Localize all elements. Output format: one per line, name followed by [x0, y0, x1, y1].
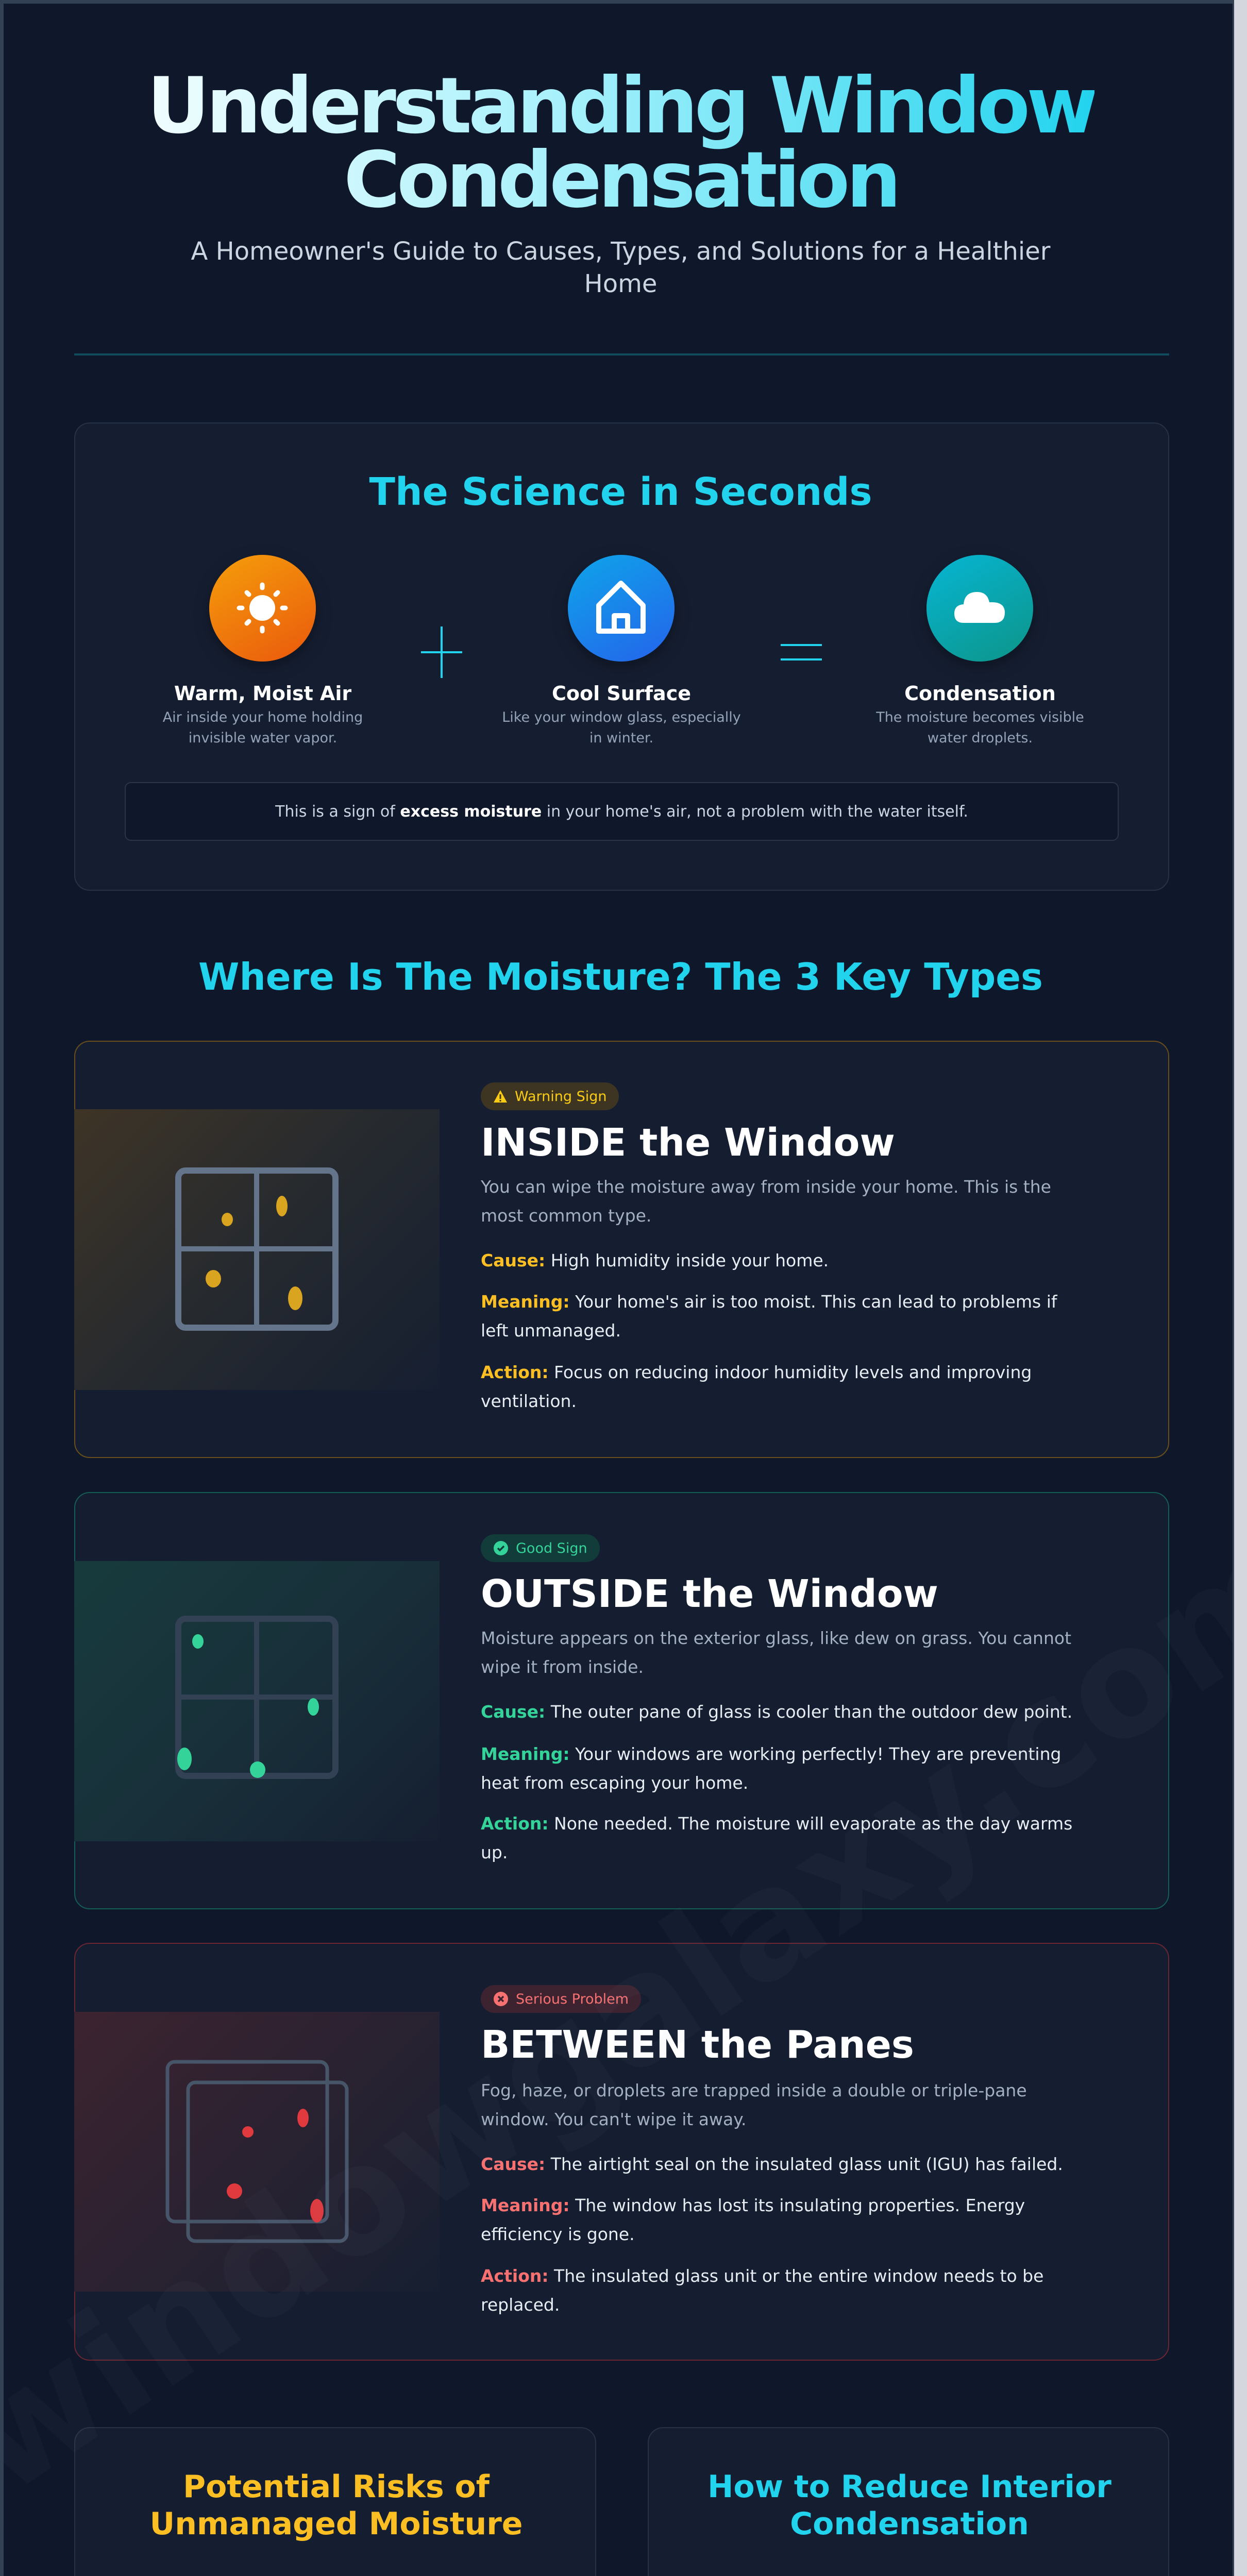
text: inside meaning: Meaning: Your home's air is too moist. This can lead to problems if [481, 1292, 1057, 1312]
text: between meaning: efficiency is gone. [481, 2224, 635, 2244]
badge: warning sign [481, 1082, 619, 1110]
text: outside action [481, 1817, 1072, 1862]
text: outside action: up. [481, 1842, 508, 1862]
text: warm moist air: invisible water vapor. [189, 730, 337, 746]
text: outside action: Action: None needed. The moisture will evaporate as the day warms [481, 1814, 1072, 1834]
text: inside description: You can wipe the moisture away from inside your home. This is the [481, 1177, 1051, 1197]
badge: warning sign: Warning Sign [515, 1088, 606, 1105]
panel: science in seconds [74, 422, 1169, 891]
text: outside description: wipe it from inside. [481, 1657, 644, 1677]
badge: good sign: Good Sign [516, 1540, 587, 1556]
callout: excess moisture: This is a sign of in your home's air, not a problem with the water itself. [275, 803, 968, 820]
text: cool surface: Cool Surface [552, 682, 691, 705]
text: warm moist air: Air inside your home holding [163, 709, 363, 725]
text: condensation [876, 685, 1083, 745]
text: between description: window. You can't wipe it away. [481, 2109, 747, 2129]
text: between description: Fog, haze, or droplets are trapped inside a double or triple-pane [481, 2080, 1027, 2100]
text: warm moist air [163, 685, 362, 745]
text: between action [481, 2269, 1043, 2314]
text: between meaning [481, 2198, 1024, 2244]
text: condensation: water droplets. [928, 730, 1033, 746]
panel: potential risks [74, 2427, 596, 2576]
callout: excess moisture: excess moisture [400, 803, 542, 820]
heading: potential risks [153, 2474, 521, 2541]
heading: between the panes: BETWEEN the Panes [481, 2023, 914, 2067]
heading: potential risks: Potential Risks of [183, 2469, 490, 2505]
text: inside description: most common type. [481, 1206, 651, 1226]
text: condensation: Condensation [904, 682, 1056, 705]
illustration: outside window [74, 1561, 440, 1841]
heading: inside the window: INSIDE the Window [481, 1121, 895, 1165]
title [154, 74, 1094, 208]
heading: 3 key types: Where Is The Moisture? The 3 Key Types [198, 955, 1043, 998]
icon: cloud [926, 555, 1033, 662]
text: cool surface: in winter. [589, 730, 653, 746]
title: Understanding Window [147, 61, 1094, 151]
panel: inside the window [74, 1041, 1169, 1458]
icon: plus [421, 626, 462, 678]
text: outside description [481, 1631, 1071, 1676]
title: Condensation [344, 135, 898, 225]
text: inside cause: Cause: High humidity inside your home. [481, 1250, 829, 1270]
badge: serious problem: Serious Problem [516, 1991, 629, 2007]
text: inside action [481, 1365, 1031, 1408]
text: condensation: The moisture becomes visible [876, 709, 1084, 725]
subtitle: Home [584, 269, 657, 298]
text: between description [481, 2083, 1026, 2129]
text: outside description: Moisture appears on the exterior glass, like dew on grass. You cannot [481, 1628, 1071, 1648]
icon: house [568, 555, 675, 662]
heading: outside the window: OUTSIDE the Window [481, 1572, 938, 1616]
badge: good sign [481, 1534, 600, 1562]
text: inside description [481, 1180, 1050, 1225]
heading: potential risks: Unmanaged Moisture [149, 2506, 523, 2542]
text: outside meaning: heat from escaping your home. [481, 1773, 748, 1793]
text: cool surface [503, 685, 740, 743]
text: inside action: Action: Focus on reducing indoor humidity levels and improving [481, 1362, 1032, 1382]
panel: reduce condensation [648, 2427, 1169, 2576]
heading: how to reduce: How to Reduce Interior [707, 2469, 1111, 2505]
badge: serious problem [481, 1985, 641, 2013]
icon: sun [209, 555, 316, 662]
text: outside meaning: Meaning: Your windows are working perfectly! They are preventing [481, 1744, 1061, 1764]
heading: the science in seconds: The Science in Seconds [369, 470, 872, 514]
illustration: inside window [74, 1109, 440, 1390]
text: between meaning: Meaning: The window has lost its insulating properties. Energy [481, 2195, 1025, 2215]
text: between action: Action: The insulated glass unit or the entire window needs to be [481, 2266, 1043, 2286]
text: outside cause: Cause: The outer pane of glass is cooler than the outdoor dew point. [481, 1702, 1072, 1722]
text: inside action: ventilation. [481, 1391, 577, 1411]
subtitle: A Homeowner's Guide to Causes, Types, and Solutions for a Healthier [191, 237, 1050, 266]
text: warm moist air: Warm, Moist Air [174, 682, 351, 705]
text: inside meaning [482, 1295, 1057, 1340]
icon: equals [781, 644, 822, 660]
text: between action: replaced. [481, 2295, 560, 2315]
panel: between the panes [74, 1943, 1169, 2361]
text: outside meaning [482, 1747, 1059, 1792]
subtitle [191, 241, 1050, 293]
text: inside meaning: left unmanaged. [481, 1320, 621, 1341]
heading: how to reduce [710, 2474, 1111, 2535]
callout: excess moisture [125, 782, 1119, 841]
illustration: between panes [74, 2012, 440, 2292]
text: between cause: Cause: The airtight seal on the insulated glass unit (IGU) has failed. [481, 2154, 1063, 2174]
text: cool surface: Like your window glass, especially [502, 709, 741, 725]
panel: outside the window [74, 1492, 1169, 1909]
heading: how to reduce: Condensation [790, 2506, 1029, 2542]
